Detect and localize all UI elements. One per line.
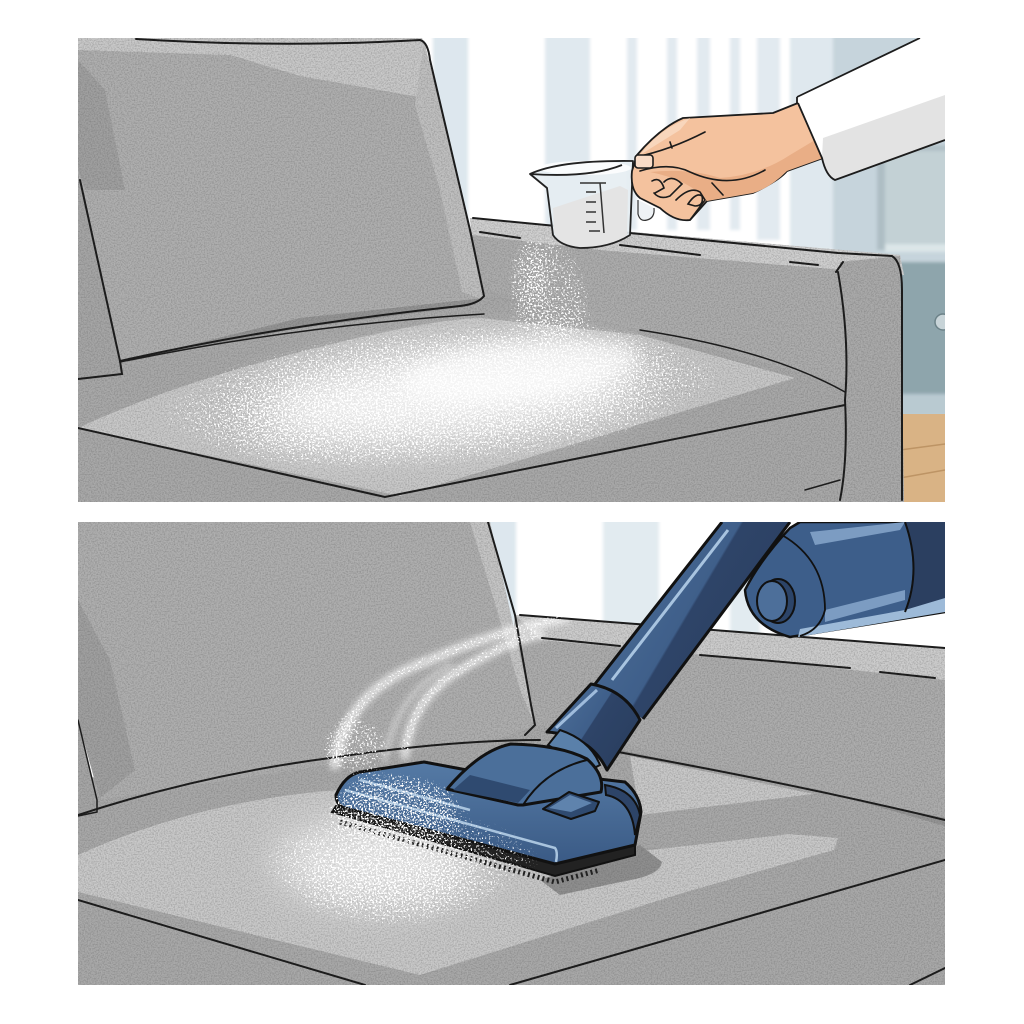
sofa outlines (78, 522, 945, 985)
icon: hand holding cup (632, 103, 823, 220)
window background (490, 522, 761, 632)
panel: vacuuming the powder (78, 515, 945, 985)
sofa outlines (78, 39, 902, 500)
icon: white sleeve (797, 38, 945, 180)
icon: measuring cup (530, 161, 654, 248)
head body (336, 762, 641, 864)
hood (447, 744, 602, 805)
infographic: two-step sofa cleaning illustration (78, 38, 945, 985)
wheel cover (605, 785, 640, 835)
icon: vacuum floor head (332, 744, 641, 882)
powder swirl airflow (335, 618, 565, 765)
icon: vacuum motor unit (745, 522, 945, 637)
powder left on seat (275, 818, 475, 902)
sofa fills (78, 38, 904, 502)
powder pile on seat (257, 330, 643, 457)
window background (432, 38, 945, 502)
icon: vacuum collar (547, 684, 640, 770)
switch button (543, 792, 599, 819)
brush strip (332, 806, 635, 876)
powder speckles around vacuum head (262, 616, 562, 926)
sofa fills (78, 522, 945, 985)
powder speckles falling and spread (159, 236, 722, 470)
panel: sprinkling powder on the sofa (78, 30, 953, 502)
icon: vacuum tube (595, 522, 790, 719)
